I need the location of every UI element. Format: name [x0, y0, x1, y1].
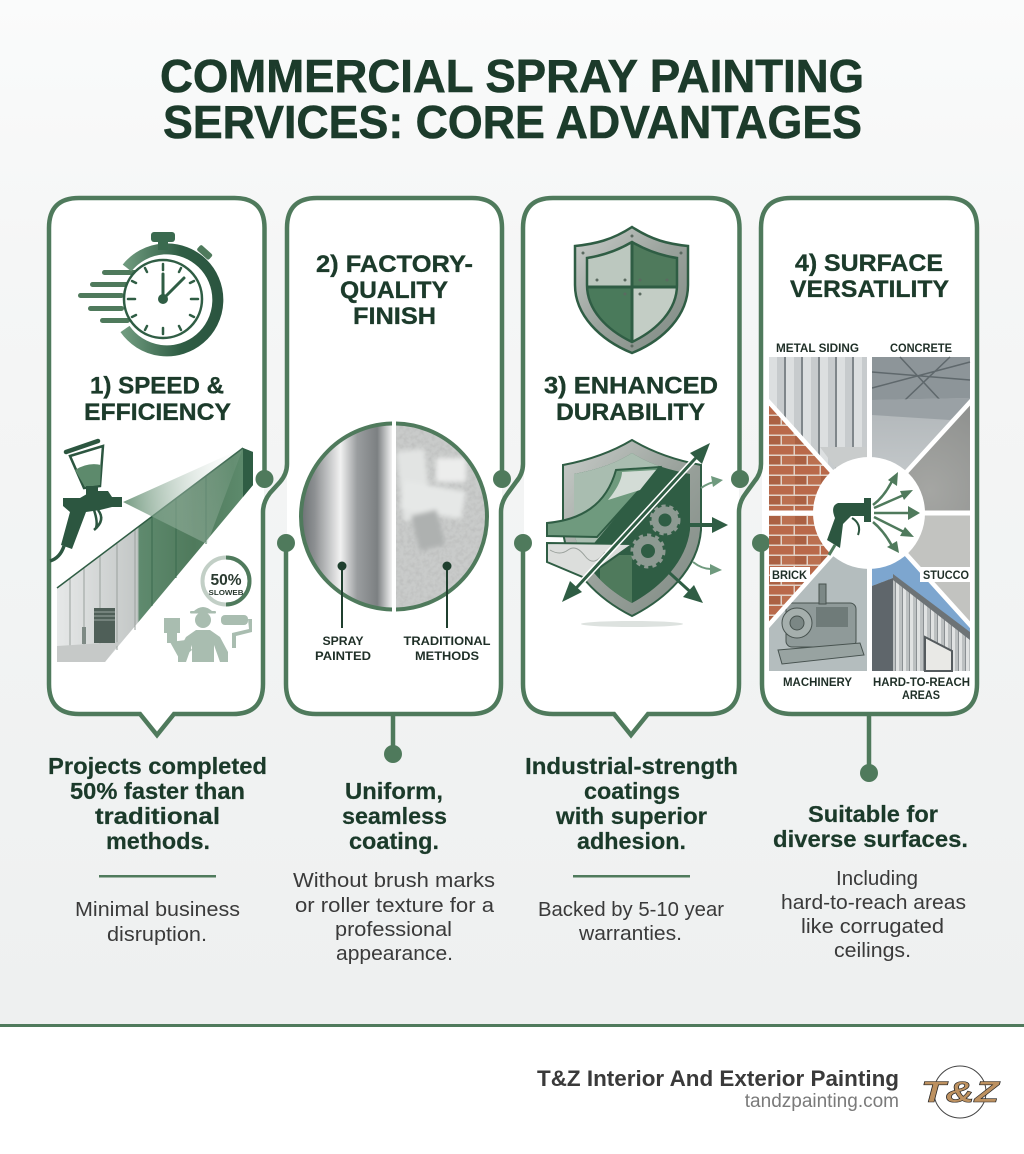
spray cone: [123, 448, 243, 544]
heading: 1) SPEED &: [90, 372, 224, 400]
heading: FINISH: [353, 303, 436, 330]
icon: spray gun: [50, 441, 122, 561]
arrows: [562, 443, 728, 603]
panel fills: [49, 198, 977, 735]
heading: [544, 372, 718, 426]
text column 3: warranties.: [578, 922, 682, 945]
panel 4: surface versatility: [767, 250, 972, 702]
heading: 2) FACTORY-: [316, 251, 473, 278]
illustration: sprayed building: [57, 448, 253, 662]
heading: [790, 250, 949, 303]
text column 1: Projects completed: [48, 753, 267, 779]
heading: 4) SURFACE: [795, 250, 943, 277]
surface: brick: [769, 402, 869, 625]
badge: 50 percent slower: 50%: [210, 572, 242, 589]
logo: [921, 1066, 1001, 1118]
text column 4: Including: [836, 867, 918, 890]
surface: metal siding: [769, 357, 869, 513]
text column 1: methods.: [106, 828, 210, 854]
title: COMMERCIAL SPRAY PAINTING: [160, 50, 864, 102]
text column 2: or roller texture for a: [295, 894, 495, 917]
surface: concrete: [869, 357, 970, 513]
text column 4: diverse surfaces.: [773, 826, 968, 852]
heading: EFFICIENCY: [84, 399, 231, 426]
labels with leader lines: TRADITIONAL: [404, 634, 490, 648]
labels with leader lines: [315, 562, 490, 663]
text column 1: 50% faster than: [70, 778, 245, 804]
text column 4: ceilings.: [834, 939, 911, 962]
text column 2: [293, 778, 495, 965]
heading: QUALITY: [340, 277, 448, 304]
gears: [632, 506, 678, 566]
heading: DURABILITY: [556, 399, 705, 426]
icon: coated shield with arrows and gears: [547, 440, 728, 627]
icon: spray gun with fan arrows: [827, 472, 920, 555]
footer website: tandzpainting.com: [745, 1091, 899, 1112]
text column 2: professional: [335, 918, 452, 941]
divider lines: [767, 355, 972, 673]
labels with leader lines: PAINTED: [315, 649, 371, 663]
surface: machinery: [769, 513, 869, 671]
text column 1: Minimal business: [75, 898, 240, 921]
panel 3: enhanced durability: [544, 227, 728, 627]
badge: 50 percent slower: SLOWEB: [208, 588, 244, 597]
text column 3: coatings: [584, 778, 680, 804]
text column 3: with superior: [555, 803, 707, 829]
heading: VERSATILITY: [790, 276, 949, 303]
surface labels: BRICK: [772, 568, 807, 582]
surface: stucco: [869, 513, 970, 625]
text column 3: Industrial-strength: [525, 753, 738, 779]
surface labels: MACHINERY: [783, 675, 852, 689]
text column 2: Uniform,: [345, 778, 443, 804]
logo: T&Z: [921, 1076, 1001, 1109]
surface: hard-to-reach areas: [869, 513, 970, 671]
footer: [0, 1024, 1024, 1154]
surface labels: AREAS: [902, 688, 940, 702]
surface grid: [767, 355, 972, 673]
connected panel outlines: [49, 198, 977, 773]
labels with leader lines: METHODS: [415, 649, 479, 663]
panel 1: speed and efficiency: [50, 232, 253, 662]
text column 2: Without brush marks: [293, 869, 495, 892]
labels with leader lines: SPRAY: [322, 634, 364, 648]
icon: stopwatch: [78, 232, 218, 351]
connector dots: [256, 470, 878, 782]
surface labels: [770, 341, 970, 702]
footer company name: T&Z Interior And Exterior Painting: [537, 1066, 899, 1091]
text column 2: coating.: [349, 828, 439, 854]
text column 4: [773, 801, 968, 962]
text column 3: Backed by 5-10 year: [538, 898, 724, 921]
icon: riveted shield: [575, 227, 688, 353]
heading: 3) ENHANCED: [544, 372, 718, 400]
text column 1: [48, 753, 267, 946]
title: SERVICES: CORE ADVANTAGES: [163, 96, 862, 148]
icon: painter: [164, 607, 252, 662]
text column 4: like corrugated: [801, 915, 944, 938]
text column 4: hard-to-reach areas: [781, 891, 966, 914]
surface labels: HARD-TO-REACH: [873, 675, 970, 689]
text column 1: disruption.: [107, 923, 207, 946]
coating layers: [547, 467, 660, 578]
text column 2: appearance.: [336, 942, 453, 965]
badge: 50 percent slower: [202, 558, 250, 604]
text column 2: seamless: [342, 803, 447, 829]
surface labels: CONCRETE: [890, 341, 952, 355]
panel 2: factory-quality finish: [298, 251, 492, 663]
heading: [84, 372, 231, 426]
title: [160, 50, 864, 148]
text column 4: Suitable for: [808, 801, 938, 827]
surface labels: STUCCO: [923, 568, 969, 582]
heading: [316, 251, 473, 330]
text column 3: [525, 753, 738, 945]
text column 3: adhesion.: [577, 828, 686, 854]
text column 1: traditional: [95, 803, 220, 829]
surface labels: METAL SIDING: [776, 341, 859, 355]
comparison circle: sprayed vs traditional: [298, 420, 492, 614]
